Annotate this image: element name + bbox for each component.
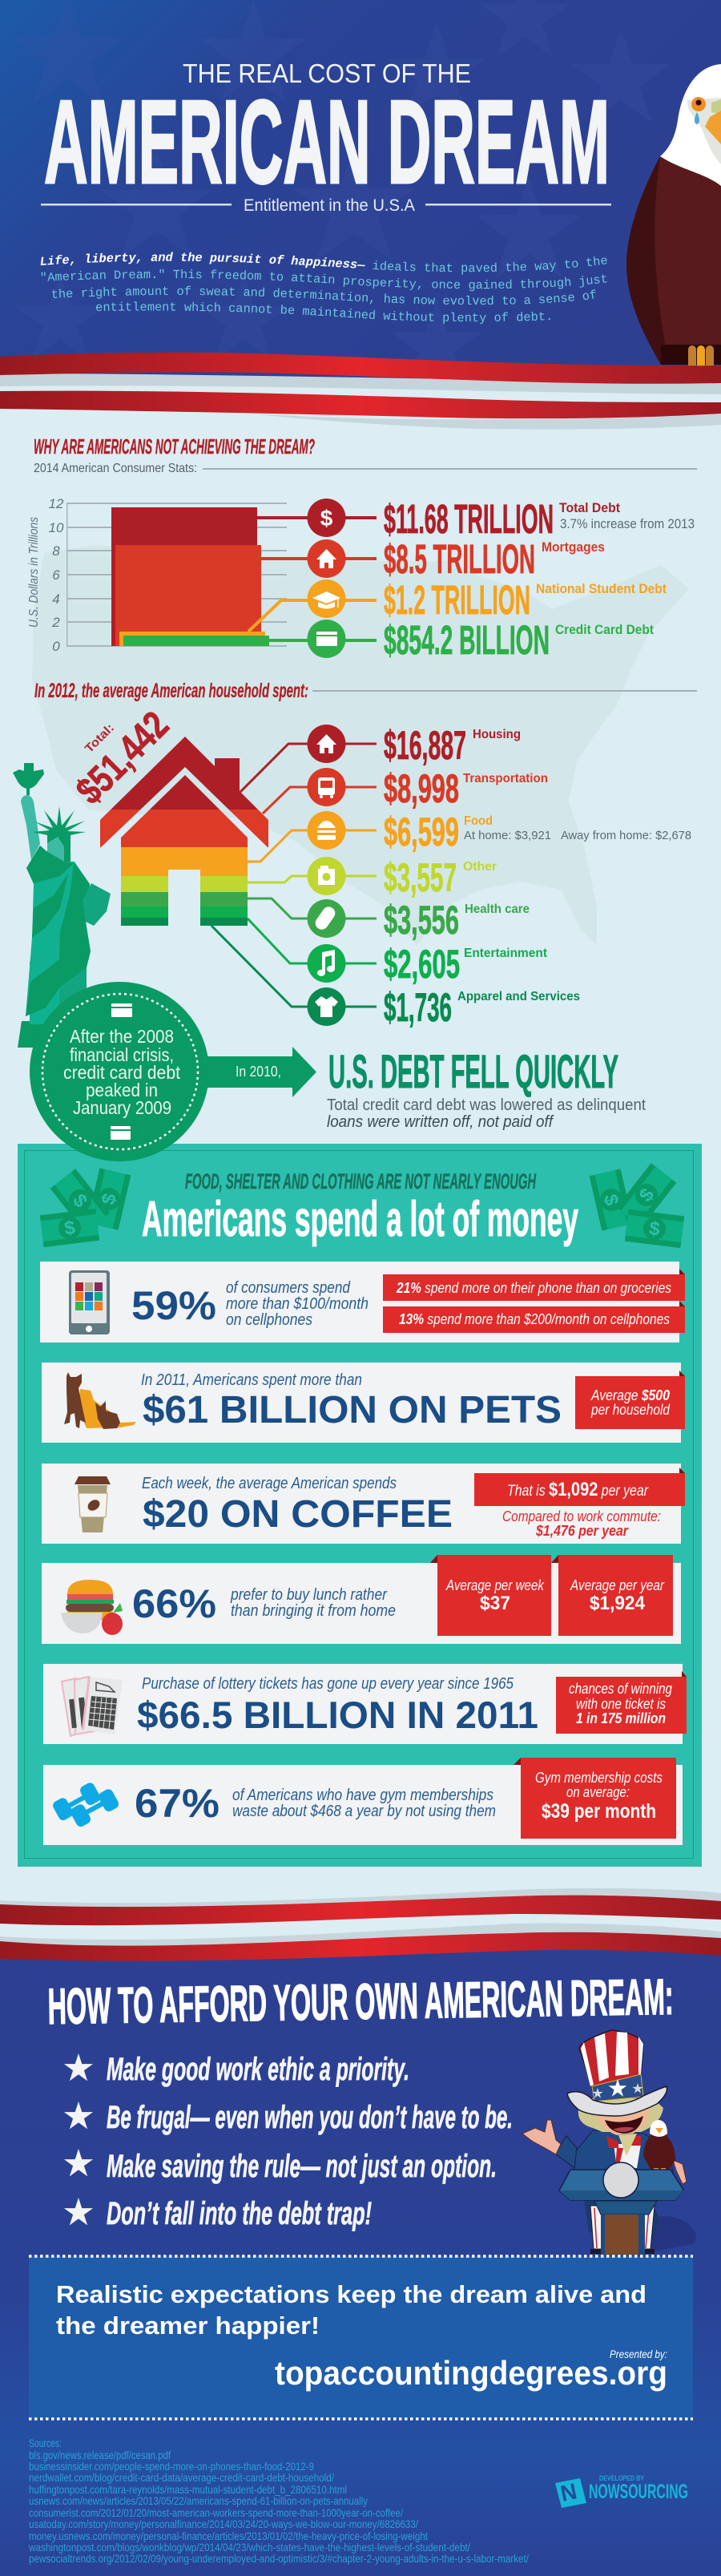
intro paragraph: Life, liberty, and the pursuit of happiness— ideals that paved the way to the (40, 252, 607, 274)
debt connectors (248, 518, 377, 640)
intro paragraph: entitlement which cannot be maintained without plenty of debt. (96, 301, 550, 324)
heading: debt fell quickly: loans were written off, not paid off (327, 1113, 554, 1131)
heading: debt fell quickly (327, 1046, 646, 1131)
callout: realistic expectations: the dreamer happier! (56, 2312, 320, 2340)
callout: credit card debt peak: After the 2008 (70, 1026, 174, 1047)
spending amounts and categories: $3,556 (384, 898, 459, 943)
sources: washingtonpost.com/blogs/wonkblog/wp/2014/04/23/which-states-have-the-highest-levels-of-student-debt/ (28, 2541, 470, 2554)
debt totals: National Student Debt (536, 581, 667, 596)
debt totals: Total Debt (559, 500, 620, 515)
debt totals: Mortgages (542, 539, 605, 555)
debt totals: $1.2 TRILLION (384, 577, 530, 623)
ribbon: top flag stripes (0, 353, 721, 430)
panel: gym: 67% (135, 1781, 220, 1826)
panel: cellphones: 13% spend more than $200/month on cellphones (399, 1311, 670, 1327)
background map (32, 545, 689, 946)
panel: cellphones: of consumers spend (226, 1279, 351, 1297)
panel: pets: per household (590, 1402, 671, 1418)
panel: gym: $39 per month (542, 1800, 656, 1823)
icon: bald eagle (626, 64, 721, 369)
panel: gym: of Americans who have gym memberships (232, 1787, 493, 1804)
spending amounts and categories: $16,887 (384, 723, 466, 768)
heading: why are Americans not achieving (34, 434, 697, 475)
icon: coffee cup (75, 1476, 111, 1532)
panel: lunch: than bringing it from home (231, 1602, 396, 1620)
icon: housing circle (308, 725, 346, 763)
panel: lunch: Average per week (445, 1577, 545, 1593)
panel: coffee (42, 1464, 685, 1544)
panel: gym (43, 1758, 683, 1845)
bar chart: consumer debt: 6 (52, 567, 60, 583)
spending amounts and categories: Other (463, 860, 497, 874)
bar chart: consumer debt: 0 (52, 639, 60, 654)
title: Entitlement in the U.S.A (244, 196, 415, 215)
icon: striped house (96, 733, 272, 926)
panel: lunch (42, 1555, 681, 1644)
icon: dollar circle (308, 499, 346, 537)
panel: coffee: That is $1,092 per year (507, 1479, 649, 1500)
icon: money right (590, 1163, 684, 1248)
icon: money right: $ (599, 1193, 622, 1208)
icon: money left (40, 1168, 131, 1247)
heading: household spending: In 2012, the average American household spent: (34, 680, 308, 702)
panel: gym: on average: (566, 1784, 630, 1800)
panel: lottery: chances of winning (569, 1681, 672, 1697)
spending amounts and categories: Food (464, 814, 493, 828)
spending amounts and categories: Away from home: $2,678 (561, 829, 691, 842)
heading: debt fell quickly: Total credit card debt was lowered as delinquent (327, 1096, 646, 1114)
heading: why are Americans not achieving: 2014 American Consumer Stats: (34, 462, 197, 475)
icon: money right: $ (648, 1217, 662, 1241)
spending amounts and categories: Apparel and Services (457, 990, 580, 1003)
sources: huffingtonpost.com/tara-reynolds/mass-mutual-student-debt_b_2806510.html (29, 2483, 347, 2496)
intro paragraph: the right amount of sweat and determination, has now evolved to a sense of (52, 285, 596, 305)
spending amounts and categories: At home: $3,921 (464, 829, 551, 842)
icon: mortgage house circle (308, 539, 346, 578)
arrow: debt fell: In 2010, (236, 1064, 281, 1080)
bar chart: consumer debt: 4 (52, 592, 60, 607)
panel: lottery: $66.5 BILLION IN 2011 (137, 1694, 538, 1736)
icon: burger and apple (61, 1580, 123, 1635)
panel: cellphones (40, 1262, 685, 1343)
panel: cellphones: 21% spend more on their phone than on groceries (396, 1280, 671, 1296)
icon: star (64, 2198, 93, 2225)
bar chart: consumer debt: 12 (49, 496, 64, 511)
icon: money right: $ (635, 1184, 659, 1206)
debt totals (384, 496, 695, 663)
icon: smartphone (69, 1270, 110, 1334)
sources: consumerist.com/2012/01/20/most-american-workers-spend-more-than-1000year-on-coffee/ (29, 2506, 403, 2519)
bar chart: consumer debt: 2 (51, 615, 60, 630)
icon: credit card circle (308, 620, 346, 658)
spending amounts and categories: $6,599 (384, 810, 459, 854)
spending connectors (211, 744, 377, 1007)
spending amounts and categories: $3,557 (384, 855, 457, 900)
logo: NowSourcing: DEVELOPED BY (599, 2474, 644, 2482)
icon: pets (64, 1372, 136, 1429)
sources: bls.gov/news.release/pdf/cesan.pdf (29, 2449, 171, 2461)
sources: businessinsider.com/people-spend-more-on-phones-than-food-2012-9 (29, 2460, 314, 2473)
spending amounts and categories: Entertainment (464, 947, 548, 960)
callout: credit card debt peak: peaked in (86, 1080, 158, 1100)
callout: credit card debt peak: financial crisis, (70, 1044, 174, 1065)
total spending: $51,442 (68, 704, 177, 813)
panel: coffee: Each week, the average American spends (142, 1475, 397, 1492)
spending amounts and categories: Health care (465, 902, 530, 916)
spending amounts and categories: $8,998 (384, 766, 459, 811)
callout: credit card debt peak (30, 982, 209, 1161)
panel: pets: Average $500 (590, 1387, 670, 1403)
spending amounts and categories (384, 723, 691, 1030)
debt totals: 3.7% increase from 2013 (560, 516, 695, 531)
intro paragraph (40, 252, 607, 324)
debt totals: $11.68 TRILLION (384, 496, 554, 542)
panel: gym: Gym membership costs (535, 1770, 663, 1786)
panel: coffee: $1,476 per year (535, 1523, 629, 1539)
panel: coffee: $20 ON COFFEE (143, 1493, 453, 1536)
footer background (0, 1948, 721, 2576)
spending amounts and categories: $2,605 (384, 942, 460, 987)
icon: dumbbells (51, 1781, 120, 1828)
arrow: debt fell (204, 1047, 316, 1097)
sources: usnews.com/news/articles/2013/05/22/americans-spend-61-billion-on-pets-annually (29, 2494, 368, 2507)
panel: lunch: $37 (480, 1593, 510, 1614)
sources: nerdwallet.com/blog/credit-card-data/average-credit-card-debt-household/ (29, 2471, 334, 2484)
panel: lunch: prefer to buy lunch rather (230, 1586, 388, 1604)
panel: cellphones: 59% (131, 1283, 216, 1328)
section background (0, 373, 721, 1956)
callout: realistic expectations: topaccountingdegrees.org (275, 2354, 667, 2392)
tips list: Make good work ethic a priority. (107, 2052, 409, 2087)
icon: graduation cap circle (308, 579, 346, 618)
header background (0, 0, 721, 421)
tips list: Don’t fall into the debt trap! (107, 2196, 372, 2231)
panel: lottery (43, 1664, 687, 1744)
panel: lottery: with one ticket is (576, 1696, 666, 1712)
ribbon: lower flag stripes (0, 1888, 721, 1961)
debt totals: $854.2 BILLION (384, 617, 550, 663)
icon: star (64, 2053, 93, 2081)
heading: Americans spend a lot of money (142, 1169, 578, 1247)
icon: pill circle (308, 899, 346, 938)
sources (28, 2437, 529, 2565)
bar chart: consumer debt: U.S. Dollars in Trillions (27, 517, 41, 628)
bar chart: consumer debt (27, 496, 287, 654)
icon: camera circle (308, 857, 346, 895)
intro paragraph: "American Dream." This freedom to attain prosperity, once gained through just (42, 269, 607, 292)
icon: money left: $ (63, 1217, 77, 1240)
callout: credit card debt peak: January 2009 (73, 1097, 171, 1118)
icon: burger circle (308, 811, 346, 850)
icon: music note circle (308, 944, 346, 983)
panel: pets (42, 1363, 685, 1443)
debt totals: $8.5 TRILLION (384, 536, 535, 582)
sources: pewsocialtrends.org/2012/02/09/young-underemployed-and-optimistic/3/#chapter-2-young-adults-in-the-u-s-labor-market/ (29, 2552, 529, 2565)
panel: cellphones: more than $100/month (226, 1295, 369, 1313)
panel: lunch: Average per year (570, 1577, 665, 1593)
logo: NowSourcing: N (558, 2478, 579, 2506)
icon: dollar circle: $ (320, 506, 333, 531)
icon: shirt circle (308, 987, 346, 1026)
panel: lottery: Purchase of lottery tickets has gone up every year since 1965 (142, 1675, 514, 1693)
spending amounts and categories: $1,736 (384, 985, 452, 1030)
heading: why are Americans not achieving: WHY ARE AMERICANS NOT ACHIEVING THE DREAM? (34, 434, 315, 458)
icon: star (64, 2102, 93, 2129)
sources: Sources: (29, 2437, 62, 2449)
icon: money left: $ (68, 1190, 92, 1212)
debt totals: Credit Card Debt (555, 622, 654, 637)
bar chart: consumer debt: 8 (52, 543, 60, 559)
panel: cellphones: on cellphones (226, 1311, 312, 1329)
bar chart: consumer debt: 10 (49, 520, 64, 535)
panel: lunch: 66% (132, 1581, 216, 1626)
icon: money left: $ (98, 1191, 121, 1207)
callout: credit card debt peak: credit card debt (63, 1062, 181, 1083)
icon: star (64, 2149, 93, 2176)
panel: pets: In 2011, Americans spent more than (141, 1371, 362, 1389)
sources: usatoday.com/story/money/personalfinance/2014/03/24/20-ways-we-blow-our-money/6826633/ (29, 2517, 418, 2530)
panel: spending on extras (18, 1144, 702, 1867)
panel: lunch: $1,924 (590, 1593, 646, 1614)
spending amounts and categories: Housing (473, 728, 521, 741)
total spending: Total: (83, 721, 117, 756)
panel: lottery: 1 in 175 million (576, 1710, 666, 1726)
panel: pets: $61 BILLION ON PETS (143, 1389, 562, 1431)
panel: gym: waste about $468 a year by not using them (232, 1803, 496, 1820)
callout: realistic expectations: Realistic expectations keep the dream alive and (56, 2280, 646, 2308)
icon: Uncle Sam at podium (522, 2030, 696, 2255)
icon: bus circle (308, 768, 346, 806)
icon: lottery tickets (62, 1676, 123, 1736)
callout: realistic expectations: Presented by: (610, 2348, 667, 2360)
logo: NowSourcing (555, 2474, 688, 2508)
callout: realistic expectations (29, 2256, 693, 2419)
sources: money.usnews.com/money/personal-finance/articles/2013/01/02/the-heavy-price-of-losing-weight (29, 2530, 428, 2542)
spending amounts and categories: Transportation (463, 772, 548, 785)
tips list (64, 2052, 513, 2231)
icon: statue of liberty (13, 763, 111, 1048)
title: THE REAL COST OF THE (183, 59, 471, 88)
panel: coffee: Compared to work commute: (502, 1508, 661, 1524)
